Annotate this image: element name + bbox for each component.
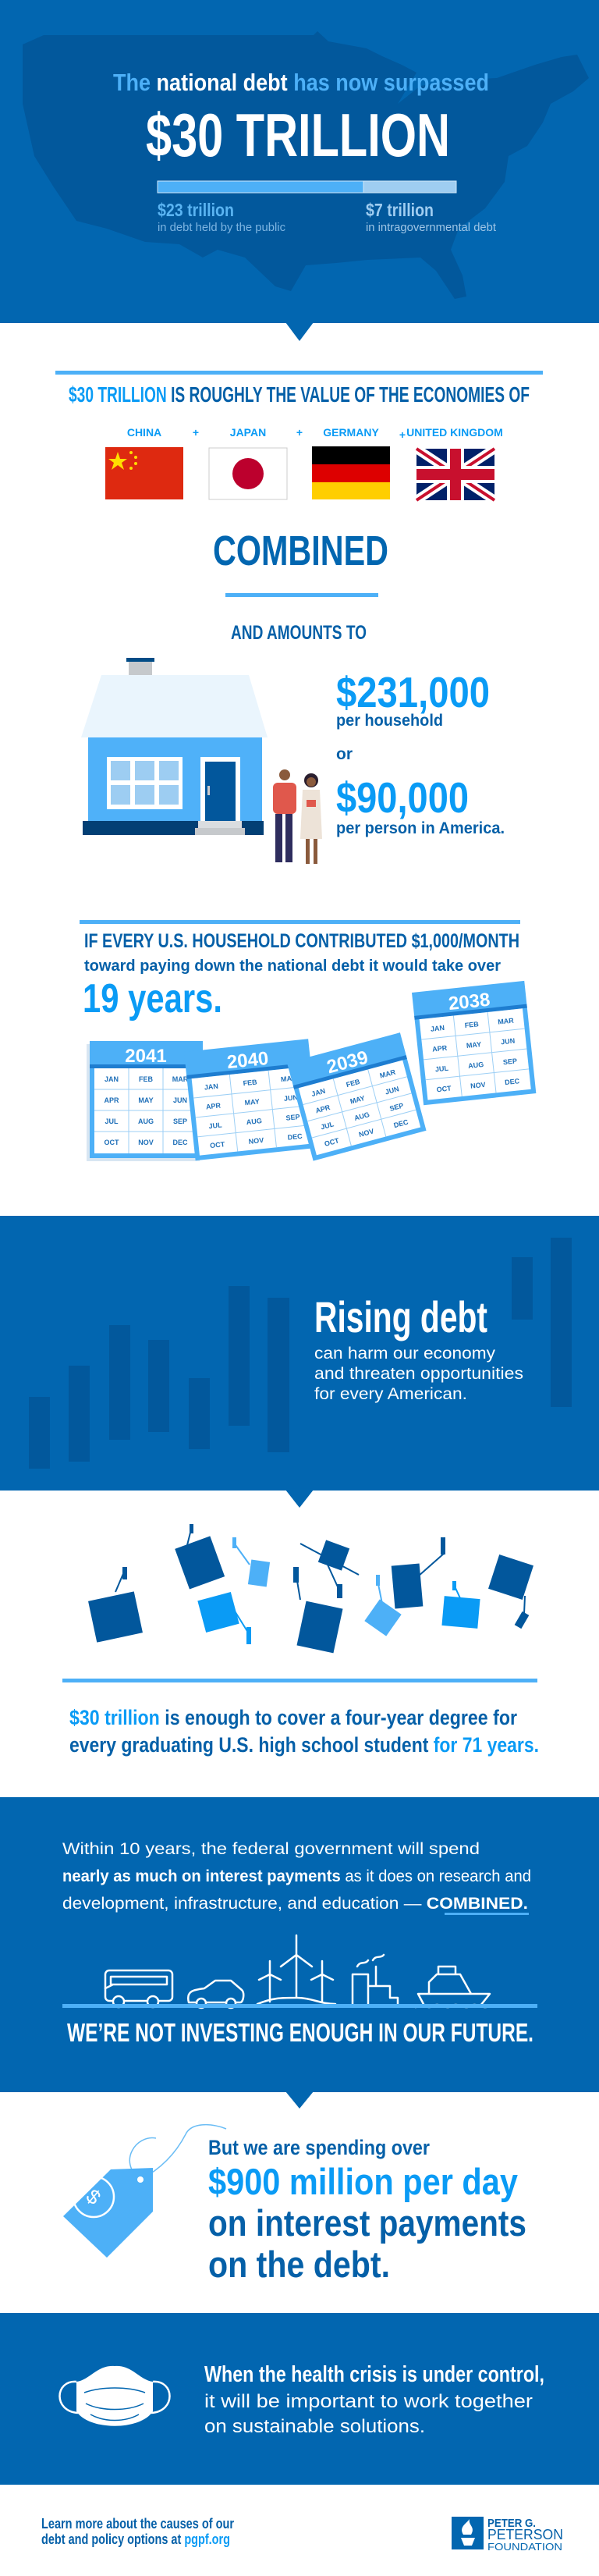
country labels: + [296, 426, 303, 439]
logo: peterson foundation: PETER G. [487, 2517, 536, 2530]
flag: united kingdom [416, 449, 494, 500]
calendar: 2038: JAN [430, 1024, 445, 1033]
calendar: 2039 [287, 1032, 427, 1161]
text: interest vs investment: nearly as much on interest payments as it does on research and [62, 1867, 531, 1885]
calendar: 2038: OCT [436, 1084, 452, 1093]
calendar: 2038: NOV [470, 1081, 486, 1090]
text: interest vs investment: development, infrastructure, and education — COMBINED. [62, 1895, 528, 1913]
label: public debt: in debt held by the public [158, 221, 285, 234]
calendar: 2039: MAR [379, 1068, 397, 1080]
panel: four-year degree [62, 1679, 539, 1757]
calendar: 2038: APR [432, 1044, 448, 1053]
panel: 19 years: toward paying down the national debt it would take over [84, 958, 501, 975]
calendar: 2038 [412, 981, 536, 1105]
panel: hero [0, 0, 599, 323]
calendar: 2038: DEC [505, 1077, 520, 1086]
heading: combined: COMBINED [213, 528, 388, 574]
calendar: 2041: MAY [138, 1096, 154, 1104]
calendar: 2039: SEP [388, 1101, 404, 1113]
chart: background bars [29, 1238, 572, 1469]
text: harm economy: can harm our economy [314, 1345, 496, 1363]
text: 900 million per day: $900 million per day [208, 2161, 518, 2202]
calendar: 2041: FEB [139, 1075, 154, 1083]
text: work together [204, 2362, 544, 2437]
panel: investing in future [0, 1797, 599, 2092]
calendar: 2039: JAN [310, 1087, 326, 1098]
stat: per household: or [336, 745, 353, 763]
calendar: 2041: APR [104, 1096, 119, 1104]
footer: learn more [41, 2516, 234, 2547]
icon: price tag [63, 2125, 226, 2258]
stacked bar [158, 181, 456, 193]
calendar: 2040: FEB [243, 1078, 258, 1087]
calendar: 2041: OCT [105, 1139, 119, 1146]
calendar: 2038: SEP [502, 1057, 517, 1066]
label: intragovernmental debt [366, 200, 497, 234]
illustration: people [273, 769, 322, 864]
stat: per person: per person in America. [336, 819, 505, 837]
calendar: 2038: FEB [464, 1020, 480, 1029]
text: work together: on sustainable solutions. [204, 2416, 425, 2437]
map: united states silhouette [23, 31, 589, 299]
calendar: 2038: JUL [434, 1064, 449, 1073]
calendar: 2039: APR [314, 1103, 331, 1114]
calendar: 2041: JAN [105, 1075, 119, 1083]
calendar: 2040: AUG [246, 1117, 262, 1126]
panel: four-year degree: every graduating U.S. high school student for 71 years. [69, 1733, 539, 1757]
headline: 19 years: 19 years. [83, 976, 222, 1022]
subheading: and amounts to: AND AMOUNTS TO [231, 622, 367, 644]
calendar: 2040: SEP [285, 1113, 300, 1122]
calendar: 2039: MAY [349, 1094, 366, 1106]
text: interest vs investment [62, 1840, 531, 1915]
calendar: 2041 [87, 1041, 203, 1161]
arrow: pointer down [285, 322, 314, 341]
label: public debt [158, 200, 285, 234]
calendar: 2041: JUN [173, 1096, 187, 1104]
calendar: 2041: NOV [138, 1139, 154, 1146]
text: 900 million per day [208, 2136, 526, 2285]
flag: germany [312, 446, 390, 499]
illustration: graduation caps [88, 1524, 533, 1653]
label: intragovernmental debt: in intragovernmental debt [366, 221, 497, 234]
illustration: house [81, 658, 268, 835]
calendar: 2040: APR [205, 1101, 222, 1110]
calendar: 2040: DEC [287, 1132, 303, 1142]
arrow: pointer down [285, 1490, 314, 1508]
label: public debt: $23 trillion [158, 200, 234, 220]
calendar: 2040 [184, 1039, 320, 1160]
country labels [127, 426, 503, 441]
country labels: + [399, 428, 406, 441]
calendar: 2039: OCT [324, 1136, 340, 1148]
country labels: UNITED KINGDOM [406, 426, 503, 439]
calendar: 2040: NOV [248, 1136, 264, 1146]
text: 900 million per day: on the debt. [208, 2244, 390, 2285]
icons: infrastructure [105, 1935, 490, 2008]
calendar: 2038: MAR [498, 1017, 515, 1026]
logo: peterson foundation: PETERSON [487, 2527, 563, 2542]
calendar: 2039: AUG [353, 1110, 370, 1122]
calendar: 2039: JUL [320, 1120, 335, 1131]
calendar: 2040: MAR [281, 1074, 298, 1083]
calendar: 2040: 2040 [226, 1048, 270, 1073]
calendar: 2041: DEC [172, 1139, 188, 1146]
country labels: + [193, 426, 199, 439]
country labels: GERMANY [323, 426, 379, 439]
calendar: 2040: MAY [244, 1097, 260, 1107]
calendar: 2040: OCT [210, 1140, 225, 1149]
flag: japan [209, 448, 287, 499]
footer: learn more: Learn more about the causes of our [41, 2516, 234, 2532]
calendar: 2041: MAR [172, 1075, 189, 1083]
panel: health crisis [0, 2313, 599, 2485]
icon: face mask [59, 2366, 170, 2426]
arrow: pointer down [285, 2091, 314, 2109]
calendar: 2040: JAN [204, 1082, 218, 1092]
text: 900 million per day: on interest payments [208, 2202, 526, 2244]
logo: peterson foundation: FOUNDATION [487, 2541, 562, 2553]
calendar: 2038: MAY [466, 1040, 482, 1050]
calendar: 2041: SEP [173, 1117, 187, 1125]
calendar: 2041: 2041 [125, 1046, 167, 1067]
text: interest vs investment: Within 10 years, the federal government will spend [62, 1840, 480, 1858]
calendar: 2038: AUG [468, 1061, 484, 1070]
heading: rising debt: Rising debt [314, 1292, 487, 1341]
calendar: 2039: DEC [393, 1117, 409, 1129]
text: harm economy: for every American. [314, 1385, 467, 1403]
stat: per household: per household [336, 712, 443, 730]
text: 900 million per day: But we are spending over [208, 2136, 430, 2159]
calendar: 2039: FEB [346, 1078, 361, 1089]
text: harm economy [314, 1345, 523, 1403]
panel: economies comparison [55, 371, 543, 644]
calendar: 2038: JUN [501, 1037, 516, 1046]
title: national debt: The national debt has now surpassed [113, 69, 489, 96]
calendar: 2040: JUN [283, 1093, 298, 1103]
country labels: CHINA [127, 426, 161, 439]
panel: rising debt [0, 1216, 599, 1491]
text: harm economy: and threaten opportunities [314, 1365, 523, 1383]
footer: learn more: debt and policy options at pgpf.org [41, 2532, 230, 2547]
icon: price tag: $ [82, 2184, 106, 2209]
logo: peterson foundation [452, 2517, 563, 2553]
calendar: 2040: JUL [208, 1121, 223, 1130]
stat: per person: $90,000 [336, 773, 469, 822]
calendar: 2041: JUL [105, 1117, 119, 1125]
label: intragovernmental debt: $7 trillion [366, 200, 434, 220]
calendar: 2039: NOV [358, 1127, 374, 1139]
text: work together: it will be important to work together [204, 2391, 533, 2412]
calendar: 2039: 2039 [324, 1046, 370, 1078]
calendar: 2041: AUG [138, 1117, 154, 1125]
panel: 19 years [80, 920, 520, 1022]
headline number: $30 TRILLION [146, 101, 450, 169]
calendar: 2039: JUN [385, 1085, 400, 1096]
stat: per household: $231,000 [336, 668, 490, 716]
panel: four-year degree: $30 trillion is enough to cover a four-year degree for [69, 1706, 517, 1729]
calendar: 2038: 2038 [448, 990, 491, 1014]
stat: per household [336, 668, 490, 763]
flag: china [105, 447, 183, 499]
stat: per person [336, 773, 505, 837]
country labels: JAPAN [230, 426, 266, 439]
